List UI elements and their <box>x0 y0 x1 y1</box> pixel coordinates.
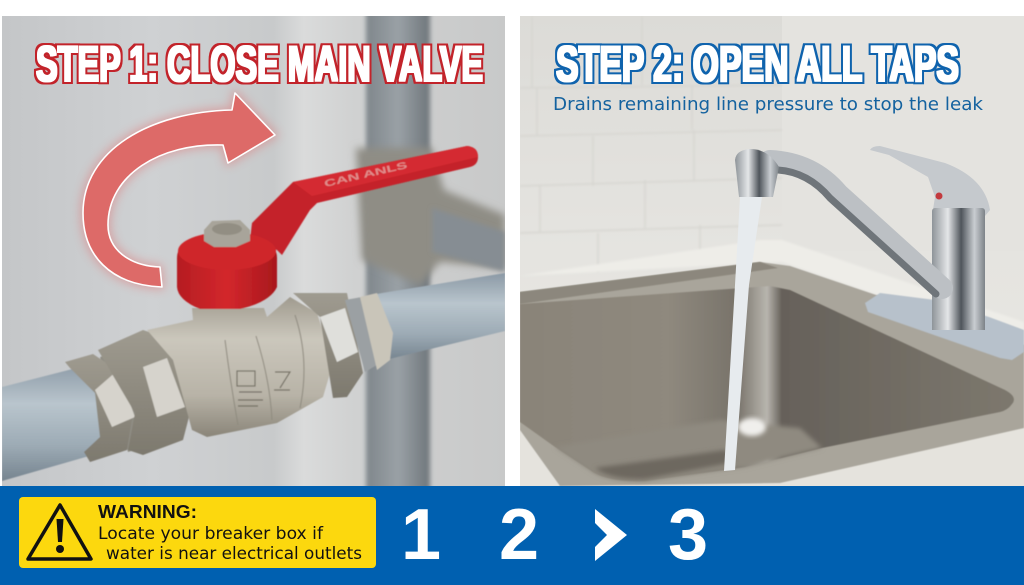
faucet aerator <box>735 149 779 197</box>
bottom band <box>0 486 1024 585</box>
arrow glow <box>83 93 275 287</box>
callout: warning <box>19 497 376 568</box>
hot indicator <box>936 192 942 200</box>
basin highlight <box>738 418 766 436</box>
hex bolt <box>204 220 250 247</box>
icon: warning triangle <box>28 505 91 559</box>
pipe nut middle <box>98 330 190 455</box>
collar right <box>360 293 393 370</box>
step number 1: 1 <box>401 495 441 575</box>
threaded section right <box>345 297 376 372</box>
valve casting marks <box>225 315 304 425</box>
subheading: step 2: Drains remaining line pressure to stop the leak <box>553 94 984 115</box>
warning title: WARNING: <box>98 502 197 522</box>
faucet collar <box>932 208 985 222</box>
counter back edge <box>560 241 932 298</box>
valve assembly <box>2 146 505 481</box>
union nut right <box>293 293 363 398</box>
warning text line 1: Locate your breaker box if <box>98 524 324 544</box>
curved arrow <box>83 93 275 287</box>
red valve hub <box>176 252 278 310</box>
handle lettering: CAN ANLS <box>323 160 408 190</box>
valve body <box>147 297 333 437</box>
front pipe right <box>370 273 505 360</box>
warning text line 2: water is near electrical outlets <box>106 544 362 564</box>
red valve handle <box>250 146 478 255</box>
step number 3: 3 <box>668 495 708 575</box>
panel: step 2 sink photo <box>520 16 1024 486</box>
pipe nut left <box>65 354 133 462</box>
background pipe fitting <box>356 148 505 285</box>
basin speckles <box>595 450 735 479</box>
faucet lever <box>870 146 990 216</box>
water stream <box>724 197 762 471</box>
wall tile lines <box>538 132 702 232</box>
warning box <box>19 497 376 568</box>
faucet spout <box>770 161 942 294</box>
counter front <box>520 420 1024 486</box>
panel: step 1 valve photo <box>2 10 505 500</box>
faucet body <box>932 222 985 330</box>
basin floor shading <box>555 420 822 481</box>
background horizontal pipe <box>432 208 505 272</box>
threaded section left <box>100 356 136 452</box>
sink rim <box>520 262 1024 486</box>
sink basin <box>520 286 1014 481</box>
background vertical pipe <box>366 10 430 500</box>
arrow body <box>83 93 275 287</box>
heading: step 1: STEP 1: CLOSE MAIN VALVE <box>36 36 483 92</box>
faucet deck plate <box>865 293 1024 360</box>
step number 2: 2 <box>499 495 539 575</box>
right wall <box>782 16 1024 251</box>
front pipe left <box>2 369 100 482</box>
icon: chevron arrow <box>595 509 627 561</box>
